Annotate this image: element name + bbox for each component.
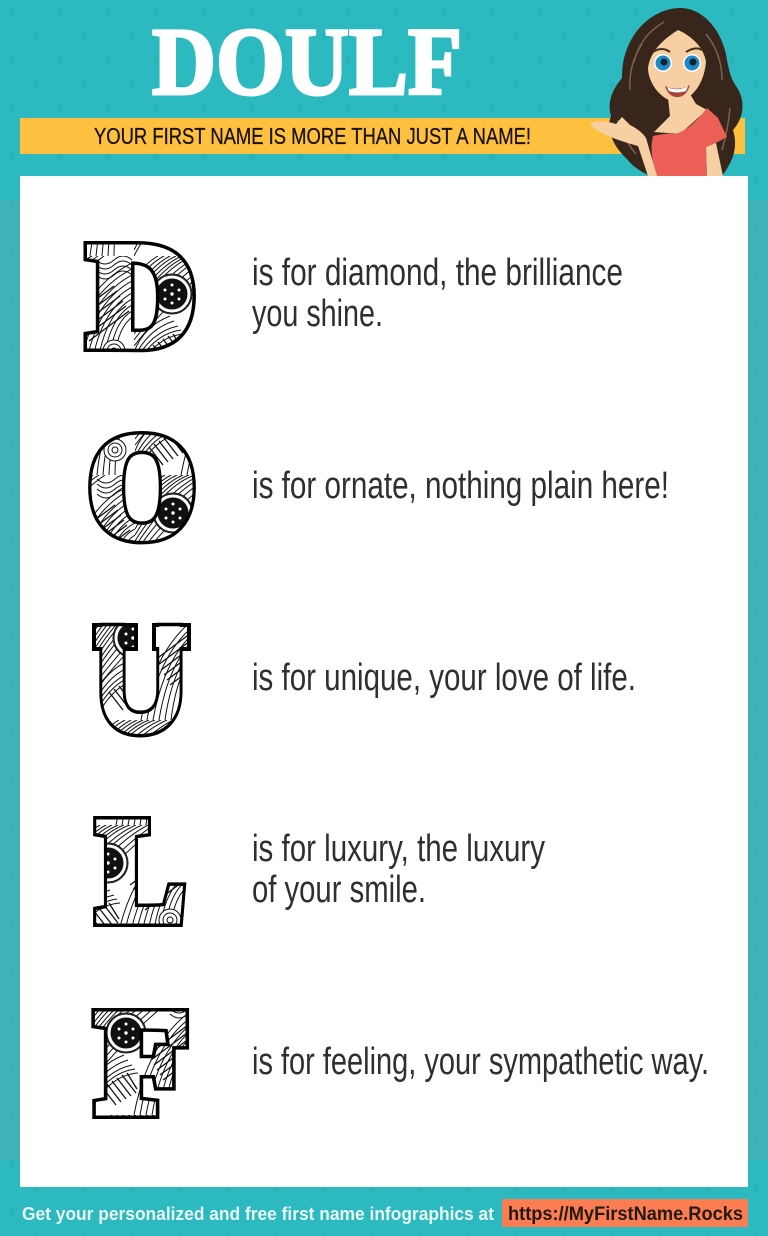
row: letter O [89, 407, 669, 567]
row: letter D [89, 216, 623, 376]
character illustration [590, 8, 742, 176]
text: unique: is for unique, your love of life. [252, 657, 636, 699]
white content panel [20, 176, 748, 1187]
letter L artwork: L [98, 791, 184, 951]
row: letter U [92, 595, 636, 763]
letter D artwork: D [89, 216, 195, 376]
letter U artwork: U [96, 595, 186, 763]
text: diamond: you shine. [252, 293, 383, 335]
letter D artwork: D [89, 216, 195, 376]
row: letter L [98, 791, 545, 951]
letter L artwork: L [98, 791, 184, 951]
subtitle banner: YOUR FIRST NAME IS MORE THAN JUST A NAME! [94, 123, 531, 149]
letter O artwork: O [89, 407, 195, 567]
text: luxury: of your smile. [252, 869, 426, 911]
letter F artwork: F [97, 983, 188, 1143]
text: diamond [252, 252, 623, 335]
letter O artwork: O [89, 407, 195, 567]
letter U artwork: U [96, 595, 186, 763]
title: DOULF [152, 8, 462, 115]
row: letter F [97, 983, 709, 1143]
letter F artwork: F [97, 983, 188, 1143]
footer call to action: Get your personalized and free first name infographics at [22, 1204, 494, 1224]
footer url badge: https://MyFirstName.Rocks [508, 1204, 743, 1225]
text: luxury [252, 828, 545, 911]
text: luxury: is for luxury, the luxury [252, 828, 545, 870]
text: diamond: is for diamond, the brilliance [252, 252, 623, 294]
subtitle banner [20, 118, 745, 154]
